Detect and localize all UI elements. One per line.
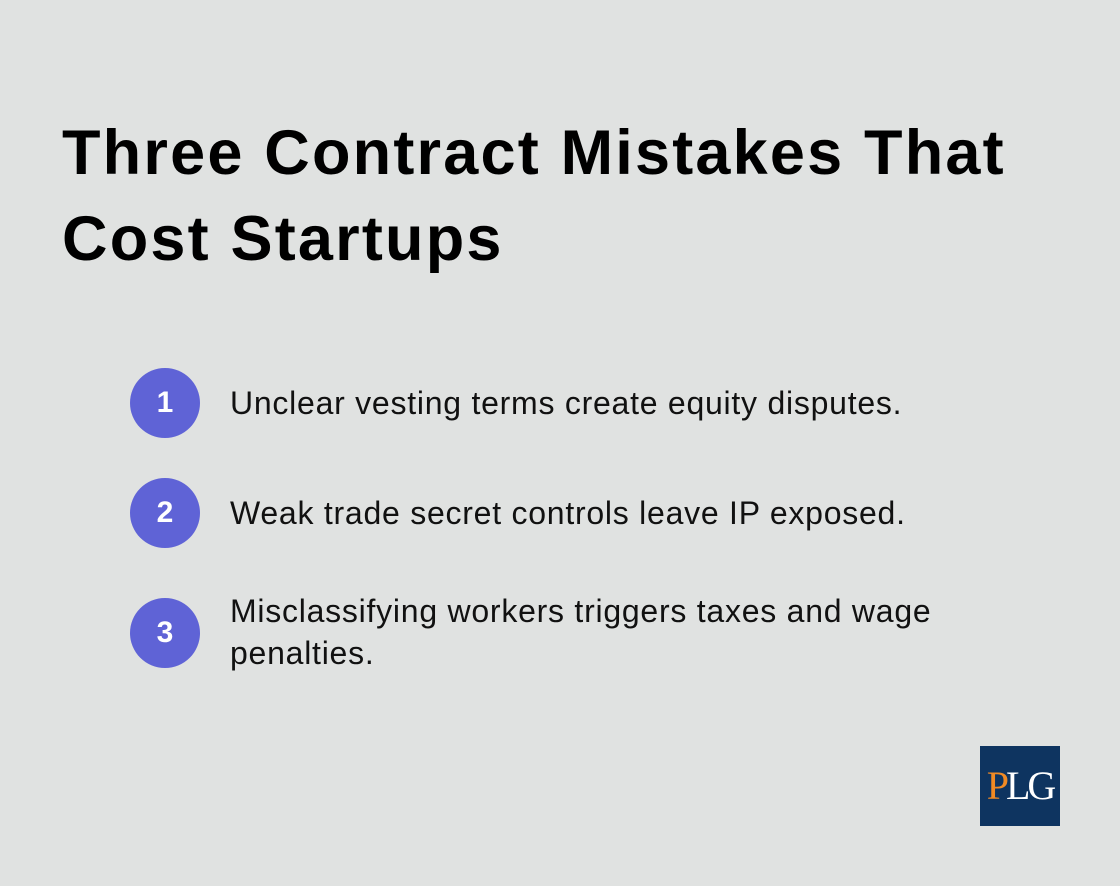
title: Three Contract Mistakes That	[62, 118, 1006, 188]
badge 3	[130, 598, 200, 668]
text 3: Misclassifying workers triggers taxes and wage penalties.	[230, 593, 931, 671]
item 2	[130, 478, 906, 548]
title	[62, 118, 1006, 274]
item 1	[130, 368, 902, 438]
item 3	[130, 593, 931, 671]
badge 3: 3	[157, 616, 173, 649]
logo: PLG	[987, 763, 1053, 808]
title: Cost Startups	[62, 204, 504, 274]
text 1: Unclear vesting terms create equity disputes.	[230, 385, 902, 421]
logo	[980, 746, 1060, 826]
badge 1	[130, 368, 200, 438]
text 2: Weak trade secret controls leave IP exposed.	[230, 495, 906, 531]
badge 2	[130, 478, 200, 548]
badge 1: 1	[157, 386, 173, 419]
badge 2: 2	[157, 496, 173, 529]
